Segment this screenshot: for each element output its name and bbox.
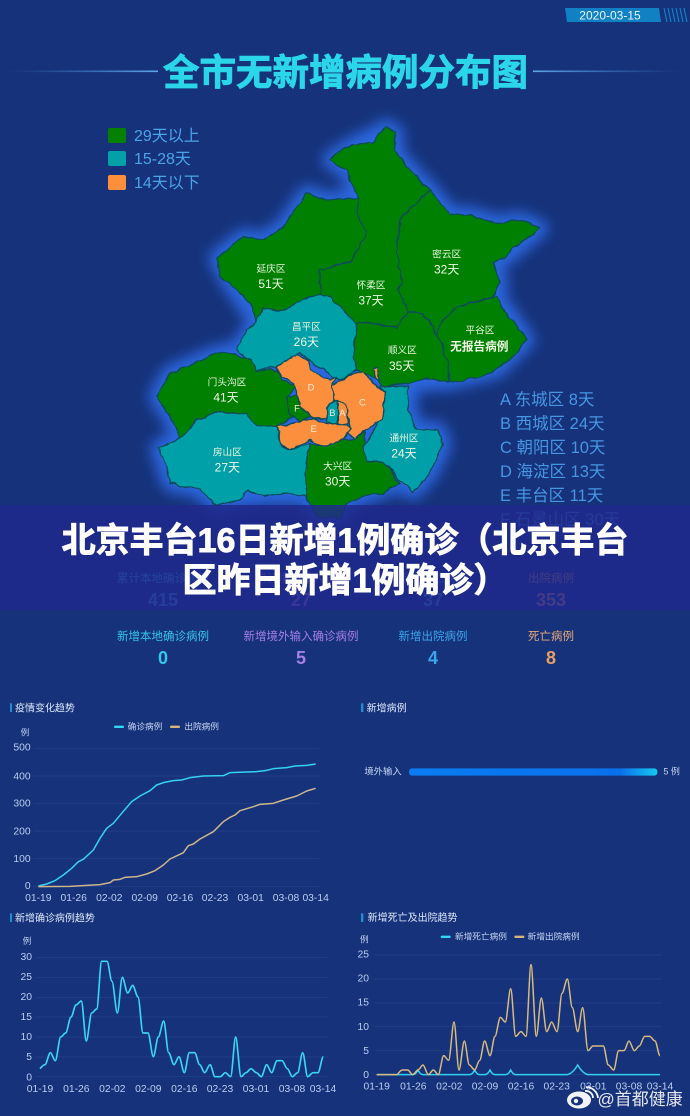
cumulative stats row: 415	[148, 590, 178, 610]
chart: new confirmed cases trend: 03-14	[310, 1084, 336, 1095]
district key list: F 石景山区 30天	[500, 510, 620, 529]
chart: new deaths and discharges trend: 新增死亡病例	[455, 931, 507, 942]
chart: new confirmed cases trend: 01-19	[27, 1084, 53, 1095]
new cases stats row: 0	[158, 648, 168, 668]
district labels: 26天	[294, 335, 319, 349]
chart: new confirmed cases trend: 例	[23, 935, 31, 946]
chart: new deaths and discharges trend: 15	[357, 998, 369, 1009]
district labels: 怀柔区	[357, 279, 386, 291]
new cases stats row: 新增境外输入确诊病例	[244, 629, 358, 643]
chart: new confirmed cases trend: 25	[20, 972, 32, 983]
chart: new deaths and discharges trend: 0	[363, 1070, 369, 1081]
icon: weibo logo	[567, 1087, 598, 1108]
legend: 15-28天	[134, 151, 191, 168]
district key list: D 海淀区 13天	[500, 462, 605, 481]
district key list: E 丰台区 11天	[500, 486, 603, 505]
chart: new deaths and discharges trend: 新增死亡及出院趋势	[368, 911, 458, 924]
cumulative stats row: 累计本地确诊病例	[117, 571, 209, 585]
chart: new deaths and discharges trend	[357, 911, 673, 1093]
chart: new deaths and discharges trend: 02-09	[472, 1082, 498, 1093]
chart: new deaths and discharges trend: 5	[363, 1046, 369, 1057]
cumulative stats row: 37	[423, 590, 443, 610]
district labels: 顺义区	[388, 346, 417, 357]
chart: epidemic trend: 100	[13, 854, 31, 865]
legend	[108, 127, 200, 192]
chart: new deaths and discharges trend: 02-23	[543, 1082, 570, 1093]
district key list: C 朝阳区 10天	[500, 438, 605, 457]
district labels: 昌平区	[292, 322, 321, 333]
new cases stats row: 8	[546, 648, 556, 668]
chart: new deaths and discharges trend: 01-26	[400, 1082, 427, 1093]
district: Fangshan	[158, 412, 310, 505]
district labels: 35天	[389, 359, 414, 373]
chart: epidemic trend: 03-14	[302, 893, 329, 904]
chart: epidemic trend: 01-19	[25, 893, 52, 904]
chart: epidemic trend: 出院病例	[184, 721, 219, 732]
chart: new confirmed cases trend: 02-02	[99, 1084, 126, 1095]
district key list	[500, 390, 620, 529]
chart: new cases by type bar	[361, 702, 680, 777]
district F: Shijingshan	[287, 395, 312, 422]
chart: epidemic trend: 500	[13, 743, 31, 754]
district: Miyun	[397, 190, 540, 335]
chart: new confirmed cases trend: 02-16	[171, 1084, 198, 1095]
chart: new deaths and discharges trend: 03-01	[580, 1082, 607, 1093]
district labels: 32天	[434, 263, 459, 277]
chart: new cases by type bar: 5 例	[663, 765, 680, 776]
district labels: 24天	[391, 447, 417, 461]
cumulative stats row: 27	[291, 590, 311, 610]
district C: Chaoyang	[332, 372, 385, 438]
chart: epidemic trend: 03-01	[237, 893, 264, 904]
chart: epidemic trend: 200	[13, 826, 31, 837]
date badge	[565, 8, 687, 22]
chart: new confirmed cases trend: 5	[26, 1052, 32, 1063]
chart: new deaths and discharges trend: 20	[357, 973, 369, 984]
chart: new deaths and discharges trend: 02-16	[508, 1082, 534, 1093]
chart: new deaths and discharges trend: 02-02	[436, 1082, 463, 1093]
chart: new deaths and discharges trend: 03-14	[647, 1082, 673, 1093]
chart: epidemic trend: 02-09	[131, 893, 158, 904]
cumulative stats row: 353	[536, 590, 566, 610]
chart: epidemic trend	[10, 702, 329, 904]
chart: new confirmed cases trend: 03-01	[243, 1084, 269, 1095]
district labels: 房山区	[213, 446, 242, 458]
cumulative stats row: 累计死亡病例	[398, 571, 468, 585]
district D: Haidian	[275, 355, 337, 418]
chart: new deaths and discharges trend: 01-19	[363, 1082, 390, 1093]
district labels: A	[339, 408, 346, 418]
district key list: B 西城区 24天	[500, 414, 605, 433]
district: Huairou	[320, 127, 430, 328]
chart: new confirmed cases trend: 02-23	[207, 1084, 233, 1095]
chart: epidemic trend: 02-16	[167, 893, 193, 904]
chart: new confirmed cases trend: 15	[20, 1012, 32, 1023]
chart: epidemic trend: 01-26	[60, 893, 87, 904]
cumulative stats row: 出院病例	[528, 571, 574, 585]
chart: new deaths and discharges trend: 25	[357, 949, 369, 960]
map of Beijing districts	[157, 127, 540, 518]
district labels: B	[329, 408, 335, 418]
headline banner: 北京丰台16日新增1例确诊（北京丰台	[62, 522, 628, 560]
cumulative stats row	[117, 571, 574, 610]
chart: new cases by type bar: 新增病例	[367, 702, 407, 715]
watermark: weibo @首都健康: @首都健康	[598, 1090, 683, 1109]
chart: epidemic trend: 400	[13, 771, 31, 782]
district labels: F	[294, 404, 300, 414]
chart: new confirmed cases trend: 20	[20, 992, 32, 1003]
title: 全市无新增病例分布图	[163, 52, 528, 93]
district labels: 密云区	[432, 249, 461, 261]
chart: new confirmed cases trend: 03-08	[279, 1084, 305, 1095]
district labels: 无报告病例	[450, 340, 508, 354]
district: Mentougou	[157, 353, 297, 438]
district labels: 通州区	[390, 434, 419, 445]
watermark: weibo @首都健康	[567, 1087, 683, 1109]
chart: new confirmed cases trend: 02-09	[135, 1084, 162, 1095]
district B: Xicheng	[327, 400, 338, 425]
cumulative stats row: 累计境外输入病例	[255, 571, 347, 585]
chart: new confirmed cases trend: 新增确诊病例趋势	[15, 912, 95, 925]
new cases stats row: 死亡病例	[528, 629, 574, 643]
chart: epidemic trend: 例	[21, 726, 29, 737]
chart: new deaths and discharges trend: 10	[357, 1022, 369, 1033]
chart: epidemic trend: 确诊病例	[128, 721, 162, 732]
district labels: 37天	[358, 293, 384, 307]
new cases stats row: 4	[428, 648, 438, 668]
district A: Dongcheng	[338, 400, 348, 425]
district labels: C	[359, 398, 366, 408]
legend: 14天以下	[134, 175, 200, 192]
district labels: 大兴区	[323, 461, 352, 473]
district: Shunyi	[353, 312, 448, 387]
district labels: 30天	[325, 475, 350, 489]
district labels: 51天	[258, 277, 284, 291]
new cases stats row: 5	[296, 648, 306, 668]
chart: new deaths and discharges trend: 03-08	[616, 1082, 642, 1093]
chart: epidemic trend: 02-02	[96, 893, 123, 904]
date badge: 2020-03-15	[579, 8, 641, 22]
district labels: 平谷区	[466, 325, 495, 336]
district labels: 27天	[215, 460, 240, 474]
district: Yanqing	[217, 193, 367, 322]
chart: epidemic trend: 03-08	[273, 893, 299, 904]
chart: new cases by type bar: 境外输入	[364, 766, 402, 777]
chart: epidemic trend: 0	[25, 881, 31, 892]
chart: new confirmed cases trend: 10	[20, 1032, 32, 1043]
new cases stats row: 新增本地确诊病例	[117, 629, 209, 643]
district labels	[208, 249, 508, 489]
district: Daxing	[305, 432, 400, 518]
chart: new deaths and discharges trend: 例	[360, 933, 369, 944]
chart: new deaths and discharges trend: 新增出院病例	[528, 931, 580, 942]
chart: new confirmed cases trend: 0	[26, 1072, 32, 1083]
headline banner: 区昨日新增1例确诊）	[183, 562, 507, 600]
district: Pinggu	[437, 297, 527, 382]
headline banner	[0, 505, 690, 610]
district key list: A 东城区 8天	[500, 390, 594, 409]
district: Changping	[237, 295, 357, 380]
district: Tongzhou	[363, 387, 443, 492]
district labels: 41天	[213, 391, 239, 405]
chart: new confirmed cases trend: 01-26	[63, 1084, 90, 1095]
chart: new confirmed cases trend: 30	[20, 952, 32, 963]
chart: epidemic trend: 02-23	[202, 893, 228, 904]
district labels: E	[311, 424, 317, 434]
new cases stats row	[117, 629, 574, 668]
new cases stats row: 新增出院病例	[398, 629, 468, 643]
district labels: D	[308, 383, 315, 393]
district labels: 延庆区	[257, 263, 286, 275]
district E: Fengtai	[277, 418, 352, 450]
chart: epidemic trend: 300	[13, 799, 31, 810]
chart: new confirmed cases trend	[10, 912, 336, 1095]
district labels: 门头沟区	[208, 376, 247, 388]
legend: 29天以上	[134, 127, 200, 145]
chart: epidemic trend: 疫情变化趋势	[15, 702, 75, 715]
Chaoyang exclave	[373, 367, 379, 380]
